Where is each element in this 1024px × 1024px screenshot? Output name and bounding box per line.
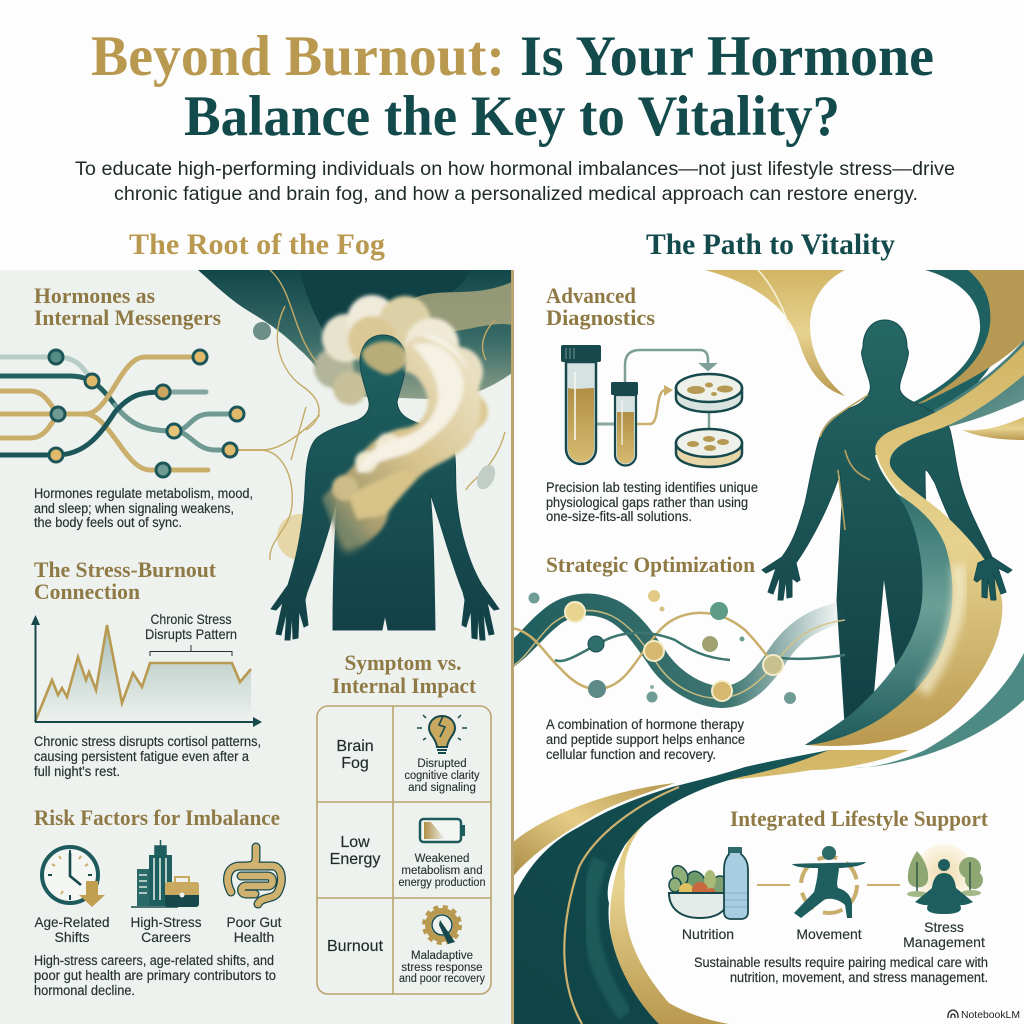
title: Balance the Key to Vitality? bbox=[184, 85, 840, 148]
section: risk factors bbox=[34, 805, 282, 998]
icon: movement figure bbox=[792, 846, 866, 918]
symptom labels: Low bbox=[340, 834, 370, 851]
connector bbox=[867, 884, 900, 886]
heading bbox=[34, 557, 217, 604]
panel: root of the fog bbox=[0, 270, 514, 1024]
impact text: metabolism and bbox=[401, 865, 483, 877]
icon: low battery bbox=[420, 819, 465, 842]
table grid bbox=[317, 706, 491, 994]
heading bbox=[34, 283, 221, 330]
soft fog fading over chest bbox=[328, 500, 393, 556]
heading: Risk Factors for Imbalance bbox=[34, 805, 280, 830]
heading: Internal Messengers bbox=[34, 305, 221, 330]
section: stress-burnout connection bbox=[31, 557, 262, 779]
heading bbox=[332, 650, 477, 698]
body text bbox=[546, 717, 745, 762]
heading: Advanced bbox=[546, 283, 636, 308]
icon labels: Movement bbox=[796, 926, 862, 942]
heading: Internal Impact bbox=[332, 673, 477, 698]
icon labels: High-Stress bbox=[130, 914, 202, 930]
body text bbox=[34, 486, 253, 530]
heading: Hormones as bbox=[34, 283, 155, 308]
icon labels: Health bbox=[234, 929, 274, 945]
symptom labels: Brain bbox=[336, 738, 374, 755]
body text: Hormones regulate metabolism, mood, bbox=[34, 486, 253, 501]
section: strategic optimization bbox=[500, 552, 845, 762]
title bbox=[91, 25, 934, 148]
icon labels: Age-Related bbox=[34, 914, 110, 930]
section: symptom vs internal impact table bbox=[317, 650, 491, 994]
heading: The Path to Vitality: The Path to Vitality bbox=[646, 228, 895, 261]
signal pathway diagram bbox=[0, 350, 262, 477]
connector bbox=[757, 884, 790, 886]
illustration: figure with ribbons bbox=[512, 270, 1024, 1024]
panel: path to vitality bbox=[500, 270, 1024, 1024]
icon: gear with tool bbox=[424, 907, 460, 944]
icon: meditation with trees bbox=[907, 844, 983, 914]
icon labels bbox=[682, 919, 985, 950]
title: Is Your Hormone bbox=[520, 25, 934, 88]
body text: nutrition, movement, and stress management. bbox=[730, 970, 988, 985]
body text: poor gut health are primary contributors to bbox=[34, 968, 276, 983]
impact text: cognitive clarity bbox=[404, 770, 480, 782]
section: integrated lifestyle support bbox=[669, 806, 989, 985]
body text: Sustainable results require pairing medical care with bbox=[694, 955, 988, 970]
icon labels: Shifts bbox=[54, 929, 90, 945]
symptom labels: Energy bbox=[330, 851, 380, 868]
body text: Chronic stress disrupts cortisol patterns, bbox=[34, 734, 261, 749]
body text: full night's rest. bbox=[34, 764, 120, 779]
icon: gut bbox=[228, 847, 281, 904]
body text bbox=[34, 734, 261, 779]
impact text: and poor recovery bbox=[399, 973, 485, 985]
right hand bbox=[974, 557, 1012, 600]
body text: High-stress careers, age-related shifts, and bbox=[34, 953, 274, 968]
heading bbox=[546, 283, 655, 330]
body text: physiological gaps rather than using bbox=[546, 495, 748, 510]
icon labels: Nutrition bbox=[682, 926, 734, 942]
icon: clock with down arrow bbox=[42, 847, 105, 907]
section: hormones as internal messengers bbox=[0, 283, 262, 530]
illustration: figure in fog bbox=[198, 270, 512, 640]
bottom swoosh bbox=[610, 750, 909, 1024]
heading: Integrated Lifestyle Support bbox=[730, 806, 989, 831]
symptom labels bbox=[327, 738, 384, 955]
silhouette with hands bbox=[271, 335, 499, 640]
subtitle: chronic fatigue and brain fog, and how a personalized medical approach can restore energy. bbox=[114, 183, 918, 205]
watermark: NotebookLM: NotebookLM bbox=[961, 1009, 1020, 1021]
icon labels: Careers bbox=[141, 929, 191, 945]
icon labels bbox=[34, 914, 282, 945]
body text bbox=[546, 480, 758, 524]
body text: A combination of hormone therapy bbox=[546, 717, 744, 732]
icon: nutrition bowl and bottle bbox=[669, 847, 748, 919]
cortisol line chart bbox=[31, 611, 262, 727]
impact text: energy production bbox=[398, 877, 486, 889]
subtitle bbox=[75, 158, 955, 205]
body text: cellular function and recovery. bbox=[546, 747, 716, 762]
body text: hormonal decline. bbox=[34, 983, 135, 998]
title: Beyond Burnout: bbox=[91, 25, 505, 88]
body text: the body feels out of sync. bbox=[34, 515, 182, 530]
body text: one-size-fits-all solutions. bbox=[546, 509, 692, 524]
icon labels: Poor Gut bbox=[226, 914, 282, 930]
cortisol line chart: Disrupts Pattern bbox=[145, 626, 237, 642]
heading: Connection bbox=[34, 579, 140, 604]
impact text bbox=[398, 758, 486, 985]
heading: The Root of the Fog: The Root of the Fog bbox=[129, 228, 385, 261]
icon: city buildings with briefcase bbox=[131, 840, 199, 907]
cortisol line chart: Chronic Stress bbox=[150, 611, 232, 627]
icon: broken lightbulb bbox=[417, 715, 467, 753]
symptom labels: Fog bbox=[341, 755, 369, 772]
gold ribbon across body bbox=[805, 345, 1024, 746]
symptom labels: Burnout bbox=[327, 938, 384, 955]
icon labels: Management bbox=[903, 934, 985, 950]
fog inside head bbox=[362, 341, 408, 375]
impact text: and signaling bbox=[408, 782, 476, 794]
teal ribbon under gold bbox=[805, 492, 952, 745]
impact text: Weakened bbox=[415, 853, 469, 865]
heading: Symptom vs. bbox=[344, 650, 462, 675]
heading: Strategic Optimization bbox=[546, 552, 755, 577]
impact text: Disrupted bbox=[417, 758, 467, 770]
heading: Diagnostics bbox=[546, 305, 655, 330]
section: advanced diagnostics bbox=[546, 283, 758, 524]
fog ribbon in front bbox=[322, 335, 480, 545]
body text: and sleep; when signaling weakens, bbox=[34, 501, 234, 516]
impact text: stress response bbox=[401, 962, 483, 974]
body text: Precision lab testing identifies unique bbox=[546, 480, 758, 495]
impact text: Maladaptive bbox=[411, 950, 473, 962]
silhouette with left hand bbox=[762, 320, 992, 725]
body text: and peptide support helps enhance bbox=[546, 732, 745, 747]
icon: test tubes and petri dishes bbox=[561, 345, 742, 467]
body text bbox=[34, 953, 276, 998]
body text bbox=[694, 955, 988, 985]
icon labels: Stress bbox=[924, 919, 964, 935]
subtitle: To educate high-performing individuals on how hormonal imbalances—not just lifestyle stress—drive bbox=[75, 158, 955, 180]
fog cloud behind head bbox=[314, 295, 488, 430]
heading: The Stress-Burnout bbox=[34, 557, 217, 582]
wave molecule graphic bbox=[500, 590, 845, 704]
body text: causing persistent fatigue even after a bbox=[34, 749, 249, 764]
